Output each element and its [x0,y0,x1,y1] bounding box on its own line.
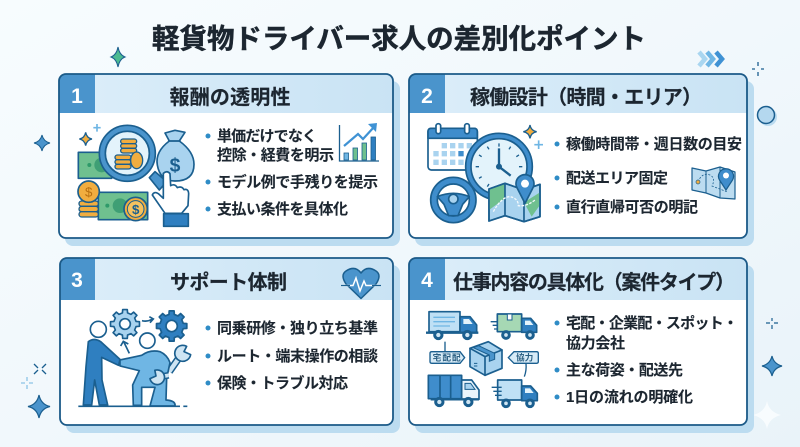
bullet list: モデル例で手残りを提示 [217,173,378,191]
panel 2: 稼働設計 [409,74,754,246]
bullet list: 直行直帰可否の明記 [566,198,698,216]
bullet list: ルート・端末操作の相談 [217,347,378,365]
bullet list [554,314,738,406]
bullet list: 支払い条件を具体化 [217,200,348,218]
bullet list [554,135,742,216]
icon: trucks, parcel and tags [426,312,538,407]
heading: 仕事内容の具体化（案件タイプ） [453,271,735,294]
bullet list: 稼働時間帯・週日数の目安 [566,135,742,153]
bullet list: 控除・経費を明示 [217,146,334,164]
heading: サポート体制 [170,271,287,294]
heading: 報酬の透明性 [170,86,290,109]
bullet list: 1日の流れの明確化 [566,388,693,406]
icon: money, magnifier and hand: $ [85,185,93,200]
icon: heart with pulse [341,268,381,298]
bullet list: 協力会社 [566,334,625,352]
number 2: 2 [421,85,433,108]
heading: 稼働設計（時間・エリア） [470,86,702,109]
panel 4: 仕事内容の具体化 [409,258,754,433]
icon: calendar, clock, steering wheel and map [428,124,543,223]
icon: money, magnifier and hand: $ [170,156,181,177]
title: 軽貨物ドライバー求人の差別化ポイント [152,23,646,54]
bullet list: 保険・トラブル対応 [217,374,348,392]
bullet list [206,319,378,392]
bullet list: 単価だけでなく [217,127,317,145]
bullet list: 主な荷姿・配送先 [566,361,683,379]
icon: growth bar chart [340,123,379,161]
icon: trucks, parcel and tags: 協力 [516,352,533,363]
number 1: 1 [71,85,83,108]
panel 1: 報酬の透明性 [59,74,400,246]
icon: money, magnifier and hand [78,124,194,226]
icon: money, magnifier and hand: $ [132,202,140,217]
icon: trucks, parcel and tags: 宅配配 [433,351,461,362]
bullet list: 配送エリア固定 [566,170,668,187]
panel 3: サポート体制 [60,258,400,433]
bullet list: 同乗研修・独り立ち基準 [217,319,378,337]
bullet list [206,127,378,218]
icon: route map [692,167,735,199]
icon: two people with gears and wrench [78,310,191,406]
bullet list: 宅配・企業配・スポット・ [566,314,738,332]
number 3: 3 [71,269,83,292]
number 4: 4 [421,269,433,292]
